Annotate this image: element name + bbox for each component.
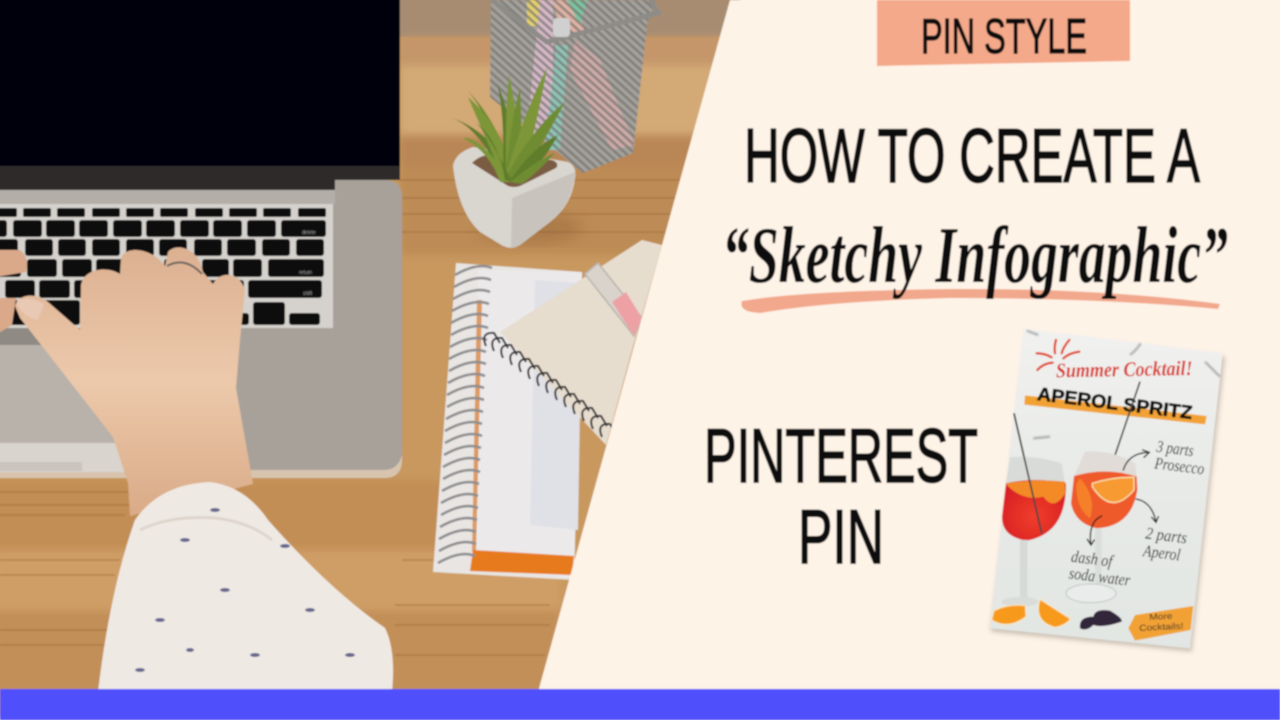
key labels: [299, 230, 316, 297]
sleeve: [98, 482, 393, 692]
key labels: shift: [303, 291, 313, 297]
key labels: delete: [302, 230, 316, 236]
annotation: soda water: soda water: [1068, 563, 1132, 590]
key labels: return: [299, 270, 312, 276]
potted plant: [452, 68, 582, 248]
left hand fingers: [0, 250, 27, 338]
trackpad and palm rest: [0, 328, 125, 472]
cream content panel: [538, 0, 1280, 692]
arrows: [1087, 450, 1158, 545]
annotation: prosecco: [1153, 437, 1205, 478]
bottom accent bar: [0, 689, 1280, 720]
ring on finger: [167, 262, 202, 274]
more cocktails button: Cocktails!: [1139, 621, 1184, 633]
annotation: prosecco: 3 parts: [1155, 437, 1195, 460]
more cocktails button: [1128, 606, 1193, 641]
pinterest pin example card: [990, 328, 1225, 652]
keyboard keys: [0, 208, 326, 325]
wooden desk: [0, 37, 740, 717]
orange slices and basil: [992, 599, 1122, 629]
straws: [1014, 382, 1140, 533]
annotation: aperol: [1141, 523, 1188, 565]
left glass: [1002, 413, 1066, 606]
wall behind desk: [0, 0, 740, 37]
label: pinterest pin: PIN: [798, 495, 884, 580]
card shadow: [991, 333, 1225, 652]
label: pinterest pin: PINTEREST: [704, 414, 978, 499]
annotation: soda water: dash of: [1070, 547, 1116, 571]
pin title band: [1024, 395, 1207, 424]
laptop: [0, 0, 402, 692]
more cocktails button: More: [1149, 611, 1173, 622]
tag: pin style: [877, 0, 1130, 66]
pencil holder: [490, 0, 658, 173]
spiral notebooks: [433, 240, 662, 580]
card background: [990, 328, 1223, 648]
right glass: [1066, 451, 1137, 603]
annotation: prosecco: Prosecco: [1153, 453, 1205, 478]
thumb nail: [17, 299, 44, 320]
annotation: soda water: [1068, 547, 1132, 590]
annotation: aperol: 2 parts: [1145, 523, 1188, 547]
label: pinterest pin: [704, 414, 978, 580]
right hand on keyboard: [15, 247, 253, 516]
pin script heading: Summer Cocktail!: [1056, 358, 1193, 382]
pin title: APEROL SPRITZ: [1036, 383, 1194, 423]
sun rays: [1037, 340, 1079, 370]
tag: pin style: PIN STYLE: [921, 10, 1087, 64]
annotation: aperol: Aperol: [1141, 541, 1182, 565]
